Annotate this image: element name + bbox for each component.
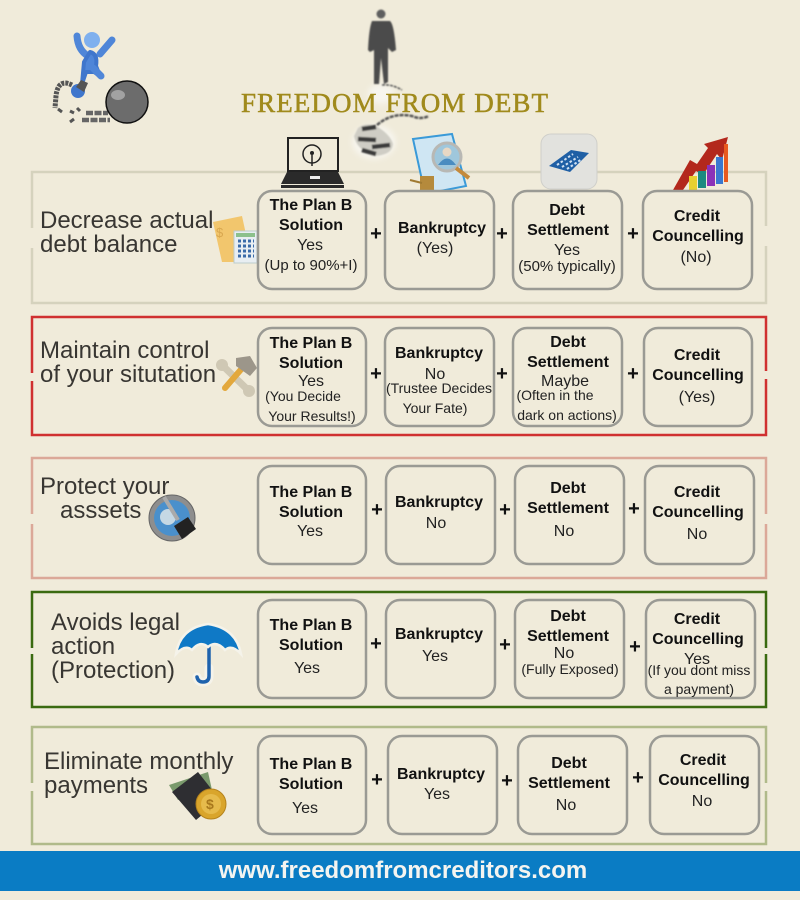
label: decrease actual debt balance: debt balance [40, 231, 177, 258]
label: decrease actual debt balance [40, 207, 213, 258]
panel: eliminate monthly payments [30, 727, 769, 844]
option card: Debt Settlement: No [556, 797, 576, 814]
icon: laptop [281, 138, 344, 188]
icon: bankruptcy document [410, 134, 469, 194]
option card: Debt Settlement [515, 466, 624, 564]
plus sign: + [627, 223, 639, 245]
option card: Credit Councelling: Councelling [652, 504, 744, 521]
option card: Debt Settlement: Debt [549, 202, 585, 219]
option card: Debt Settlement: Debt [550, 480, 586, 497]
label: decrease actual debt balance: Decrease actual [40, 207, 213, 234]
option card: The Plan B Solution: Solution [279, 504, 343, 521]
option card: Debt Settlement [515, 600, 624, 698]
option card: Credit Councelling: Councelling [652, 631, 744, 648]
option card: Credit Councelling: Councelling [658, 772, 750, 789]
option card: Credit Councelling: Councelling [652, 228, 744, 245]
option card: Bankruptcy: Bankruptcy [397, 766, 485, 783]
option card: The Plan B Solution: (Up to 90%+I) [265, 257, 357, 274]
option card: The Plan B Solution: Solution [279, 217, 343, 234]
icon: wrench and hammer [216, 356, 257, 397]
plus sign: + [499, 634, 511, 656]
icon: dollar sign weight and chain [352, 115, 429, 159]
option card: The Plan B Solution [258, 600, 366, 698]
option card: The Plan B Solution: The Plan B [270, 197, 352, 214]
option card: Debt Settlement: Debt [551, 755, 587, 772]
option card: Debt Settlement: Settlement [528, 775, 611, 792]
option card: Debt Settlement: No [554, 523, 574, 540]
option card: The Plan B Solution: Yes [297, 237, 323, 254]
option card: The Plan B Solution: Yes [292, 800, 318, 817]
option card: Credit Councelling: Credit [674, 208, 721, 225]
panel: decrease actual debt balance [30, 134, 769, 303]
plus sign: + [370, 223, 382, 245]
option card: Bankruptcy: Bankruptcy [395, 494, 483, 511]
option card: Debt Settlement: Yes [554, 242, 580, 259]
option card: The Plan B Solution: Yes [298, 373, 324, 390]
option card: Debt Settlement [513, 191, 622, 289]
option card: Debt Settlement: (50% typically) [518, 258, 616, 275]
icon: man standing with back turned [368, 10, 402, 104]
option card: Debt Settlement: Debt [550, 608, 586, 625]
option card: The Plan B Solution: Solution [279, 776, 343, 793]
option card: Credit Councelling: (No) [680, 249, 712, 266]
option card: Bankruptcy: (Yes) [417, 240, 453, 257]
option card: The Plan B Solution: Your Results!) [268, 408, 356, 424]
option card: Credit Councelling: Credit [680, 752, 727, 769]
option card: Debt Settlement [513, 328, 622, 426]
option card: The Plan B Solution: Solution [279, 637, 343, 654]
option card: Credit Councelling: No [692, 793, 712, 810]
option card: Debt Settlement: Settlement [527, 222, 610, 239]
option card: Bankruptcy: Bankruptcy [395, 345, 483, 362]
option card: Debt Settlement: Settlement [527, 354, 610, 371]
option card: Credit Councelling: Credit [674, 347, 721, 364]
option card: Debt Settlement: No [554, 645, 574, 662]
option card: The Plan B Solution: The Plan B [270, 756, 352, 773]
plus sign: + [627, 363, 639, 385]
option card: Credit Councelling [643, 191, 752, 289]
option card: Credit Councelling: Credit [674, 611, 721, 628]
option card: Debt Settlement: (Often in the [516, 387, 594, 403]
option card: Bankruptcy: Your Fate) [403, 400, 467, 416]
option card: The Plan B Solution: Yes [297, 523, 323, 540]
option card: The Plan B Solution [258, 736, 366, 834]
panel: protect your assets [30, 458, 769, 578]
option card: The Plan B Solution [258, 466, 366, 564]
label: maintain control of your situtation [40, 337, 216, 388]
label: maintain control of your situtation: Maintain control [40, 337, 209, 364]
label: eliminate monthly payments: Eliminate monthly [44, 748, 233, 775]
plus sign: + [370, 633, 382, 655]
option card: Credit Councelling: Yes [684, 651, 710, 668]
option card: The Plan B Solution: The Plan B [270, 484, 352, 501]
option card: The Plan B Solution: Yes [294, 660, 320, 677]
label: avoids legal action (protection): Avoids legal [51, 609, 180, 636]
plus sign: + [632, 767, 644, 789]
option card: Debt Settlement: Maybe [541, 373, 589, 390]
option card: Bankruptcy: No [426, 515, 446, 532]
option card: Debt Settlement: Debt [550, 334, 586, 351]
option card: Credit Councelling [645, 466, 754, 564]
label: eliminate monthly payments: payments [44, 772, 148, 799]
option card: Bankruptcy [385, 191, 494, 289]
option card: The Plan B Solution [258, 328, 366, 426]
option card: The Plan B Solution: Solution [279, 355, 343, 372]
label: avoids legal action (protection): action [51, 633, 115, 660]
option card: Bankruptcy: Bankruptcy [395, 626, 483, 643]
option card: Bankruptcy [386, 466, 495, 564]
option card: Credit Councelling [650, 736, 759, 834]
plus sign: + [499, 499, 511, 521]
option card: The Plan B Solution: The Plan B [270, 335, 352, 352]
icon: wallet with gold coin: $ [206, 796, 214, 812]
option card: Bankruptcy [385, 328, 494, 426]
label: maintain control of your situtation: of your situtation [40, 361, 216, 388]
panel: maintain control of your situtation [30, 317, 769, 435]
label: eliminate monthly payments [44, 748, 233, 799]
option card: Credit Councelling: Councelling [652, 367, 744, 384]
option card: Credit Councelling [644, 328, 752, 426]
plus sign: + [629, 636, 641, 658]
footer banner [0, 851, 800, 891]
icon: figure breaking free from ball and chain [55, 32, 148, 123]
option card: Bankruptcy: Yes [424, 786, 450, 803]
option card: Debt Settlement: dark on actions) [517, 407, 617, 423]
plus sign: + [501, 770, 513, 792]
option card: The Plan B Solution: The Plan B [270, 617, 352, 634]
plus sign: + [371, 499, 383, 521]
option card: Credit Councelling: Credit [674, 484, 721, 501]
icon: calculator button [541, 134, 597, 189]
icon: folder and calculator [213, 216, 257, 263]
label: protect your asssets: asssets [60, 497, 141, 524]
plus sign: + [496, 223, 508, 245]
option card: Bankruptcy [388, 736, 497, 834]
icon: folder and calculator: $ [216, 225, 224, 240]
label: avoids legal action (protection) [51, 609, 180, 684]
label: protect your asssets [40, 473, 169, 524]
plus sign: + [370, 363, 382, 385]
title: FREEDOM FROM DEBT [241, 88, 548, 118]
option card: Credit Councelling: No [687, 526, 707, 543]
option card: The Plan B Solution [258, 191, 366, 289]
icon: wallet with gold coin [169, 772, 226, 820]
panel: avoids legal action [30, 592, 769, 707]
option card: Debt Settlement: (Fully Exposed) [521, 661, 619, 677]
option card: Credit Councelling [646, 600, 755, 698]
label: avoids legal action (protection): (Protection) [51, 657, 175, 684]
plus sign: + [371, 769, 383, 791]
icon: lock and key [149, 495, 196, 541]
plus sign: + [628, 498, 640, 520]
option card: Bankruptcy: Yes [422, 648, 448, 665]
footer banner: www.freedomfromcreditors.com [218, 857, 587, 884]
icon: umbrella [176, 624, 241, 682]
option card: Bankruptcy: (Trustee Decides [386, 380, 492, 396]
option card: Bankruptcy [386, 600, 495, 698]
option card: Credit Councelling: (Yes) [679, 389, 715, 406]
option card: Debt Settlement: Settlement [527, 500, 610, 517]
option card: Credit Councelling: (If you dont miss [648, 662, 750, 678]
icon: rising bar chart arrow [673, 137, 728, 190]
option card: Credit Councelling: a payment) [664, 681, 734, 697]
label: protect your asssets: Protect your [40, 473, 169, 500]
option card: The Plan B Solution: (You Decide [265, 388, 341, 404]
option card: Debt Settlement: Settlement [527, 628, 610, 645]
option card: Bankruptcy: No [425, 366, 445, 383]
option card: Debt Settlement [518, 736, 627, 834]
option card: Bankruptcy: Bankruptcy [398, 220, 486, 237]
plus sign: + [496, 363, 508, 385]
